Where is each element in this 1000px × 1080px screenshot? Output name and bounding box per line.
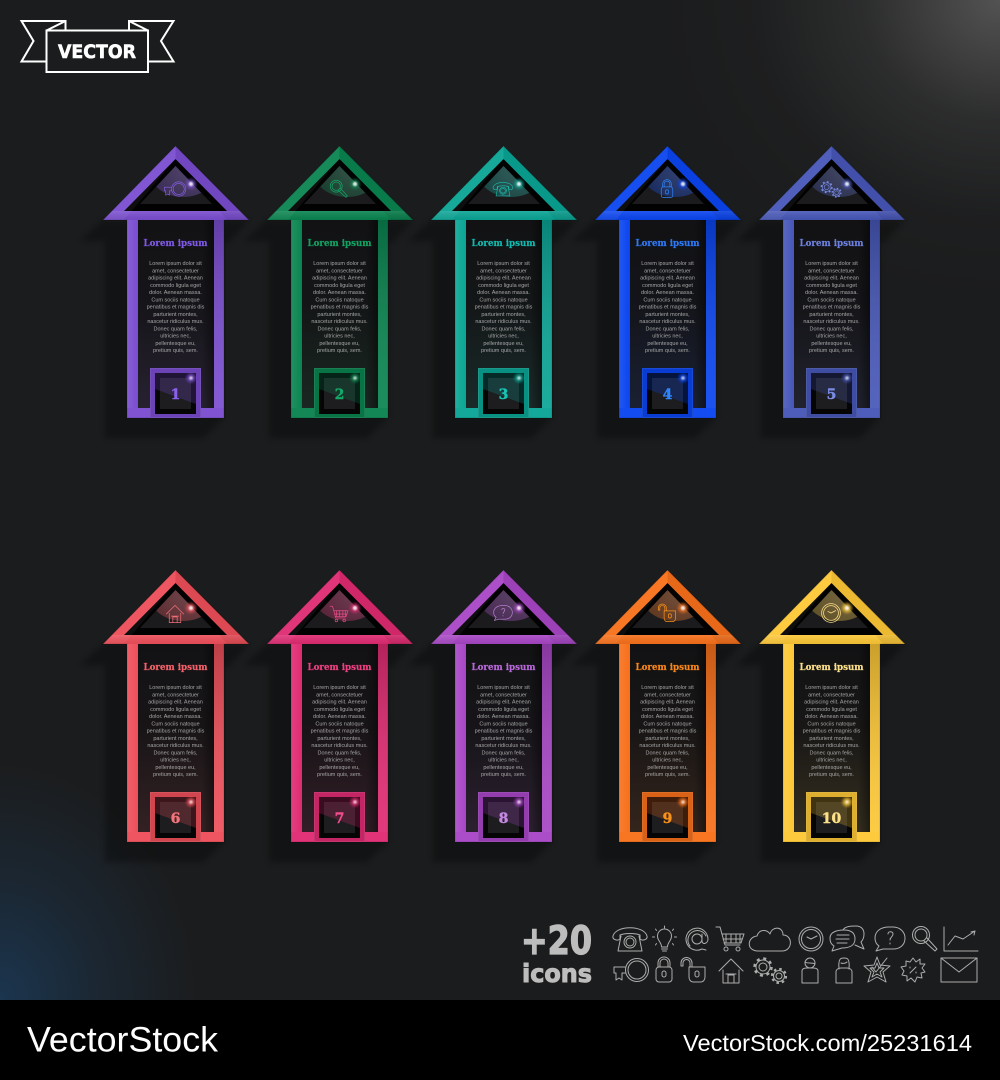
arrow 3 teal: Lorem ipsum (472, 239, 536, 249)
arrow 4 blue: parturient montes, (645, 312, 690, 318)
arrow 10 yellow: commodo ligula eget (806, 707, 857, 713)
arrow 6 red: Donec quam felis, (153, 750, 198, 756)
arrow 2 green (244, 143, 413, 438)
arrow 1 purple: pellentesque eu, (155, 341, 196, 347)
footer bar (0, 1000, 1000, 1080)
arrow 5 indigo: parturient montes, (809, 312, 854, 318)
arrow 10 yellow: 10 (822, 811, 841, 827)
arrow 9 orange: Cum sociis natoque (643, 721, 692, 727)
arrow 5 indigo: pretium quis, sem. (809, 348, 854, 354)
arrow 3 teal: commodo ligula eget (478, 283, 529, 289)
arrow 1 purple: Donec quam felis, (153, 326, 198, 332)
arrow 9 orange: Lorem ipsum (636, 663, 700, 673)
arrow 2 green: Lorem ipsum (308, 239, 372, 249)
icon: lock (661, 180, 673, 198)
icon: magnifier (330, 180, 347, 197)
arrow 5 indigo (736, 143, 905, 438)
arrow 10 yellow: pellentesque eu, (811, 765, 852, 771)
arrow 8 violet: commodo ligula eget (478, 707, 529, 713)
arrow 3 teal: Cum sociis natoque (479, 297, 528, 303)
arrow 10 yellow: Lorem ipsum dolor sit (805, 685, 858, 691)
arrow 7 pink: Lorem ipsum (308, 663, 372, 673)
arrow 8 violet: ultricies nec, (488, 758, 519, 764)
arrow 2 green: penatibus et magnis dis (311, 304, 369, 310)
arrow 7 pink: nascetur ridiculus mus. (311, 743, 368, 749)
arrow 1 purple: pretium quis, sem. (153, 348, 198, 354)
arrow 4 blue: pellentesque eu, (647, 341, 688, 347)
arrow 1 purple: nascetur ridiculus mus. (147, 319, 204, 325)
arrow 10 yellow: nascetur ridiculus mus. (803, 743, 860, 749)
arrow 9 orange: amet, consectetuer (644, 692, 691, 698)
arrow 7 pink: Cum sociis natoque (315, 721, 364, 727)
arrow 2 green: parturient montes, (317, 312, 362, 318)
arrow 8 violet: adipiscing elit. Aenean (476, 700, 531, 706)
icon set (613, 926, 978, 983)
arrow 9 orange: adipiscing elit. Aenean (640, 700, 695, 706)
arrow 10 yellow (736, 567, 905, 862)
icon: open lock (658, 604, 676, 622)
arrow 5 indigo: nascetur ridiculus mus. (803, 319, 860, 325)
arrow 10 yellow: pretium quis, sem. (809, 772, 854, 778)
arrow 7 pink: pellentesque eu, (319, 765, 360, 771)
arrow 1 purple (80, 143, 249, 438)
arrow 4 blue: penatibus et magnis dis (639, 304, 697, 310)
arrow 3 teal: pellentesque eu, (483, 341, 524, 347)
arrow 3 teal: adipiscing elit. Aenean (476, 276, 531, 282)
arrow 7 pink: 7 (335, 811, 344, 827)
arrow 4 blue: adipiscing elit. Aenean (640, 276, 695, 282)
arrow 9 orange: nascetur ridiculus mus. (639, 743, 696, 749)
arrow 2 green: commodo ligula eget (314, 283, 365, 289)
arrow 5 indigo: amet, consectetuer (808, 268, 855, 274)
arrow 6 red: Cum sociis natoque (151, 721, 200, 727)
arrow 2 green: dolor. Aenean massa. (313, 290, 366, 296)
arrow 5 indigo: Lorem ipsum dolor sit (805, 261, 858, 267)
arrow 3 teal: pretium quis, sem. (481, 348, 526, 354)
arrow 4 blue: nascetur ridiculus mus. (639, 319, 696, 325)
arrow 9 orange: pellentesque eu, (647, 765, 688, 771)
arrow 5 indigo: Lorem ipsum (800, 239, 864, 249)
arrow 6 red: adipiscing elit. Aenean (148, 700, 203, 706)
footer bar: VectorStock (27, 1020, 219, 1060)
arrow 8 violet: nascetur ridiculus mus. (475, 743, 532, 749)
icon: key (164, 182, 186, 196)
arrow 10 yellow: dolor. Aenean massa. (805, 714, 858, 720)
arrow 10 yellow: parturient montes, (809, 736, 854, 742)
arrow 2 green: Cum sociis natoque (315, 297, 364, 303)
arrow 3 teal: ultricies nec, (488, 334, 519, 340)
arrow 8 violet: Lorem ipsum dolor sit (477, 685, 530, 691)
arrow 3 teal (408, 143, 577, 438)
footer bar: VectorStock.com/25231614 (683, 1030, 972, 1056)
arrow 9 orange (572, 567, 741, 862)
+20 icons heading: icons (522, 959, 592, 988)
arrow 2 green: 2 (335, 387, 344, 403)
arrow 4 blue: ultricies nec, (652, 334, 683, 340)
arrow 8 violet: Donec quam felis, (481, 750, 526, 756)
arrow 9 orange: dolor. Aenean massa. (641, 714, 694, 720)
arrow 5 indigo: penatibus et magnis dis (803, 304, 861, 310)
arrow 5 indigo: Cum sociis natoque (807, 297, 856, 303)
arrow 9 orange: parturient montes, (645, 736, 690, 742)
arrow 9 orange: commodo ligula eget (642, 707, 693, 713)
arrow 4 blue (572, 143, 741, 438)
icon: clock (822, 604, 840, 622)
arrow 10 yellow: amet, consectetuer (808, 692, 855, 698)
arrow 10 yellow: Cum sociis natoque (807, 721, 856, 727)
arrow 10 yellow: adipiscing elit. Aenean (804, 700, 859, 706)
arrow 6 red: commodo ligula eget (150, 707, 201, 713)
arrow 5 indigo: 5 (827, 387, 836, 403)
arrow 10 yellow: penatibus et magnis dis (803, 728, 861, 734)
arrow 10 yellow: Donec quam felis, (809, 750, 854, 756)
arrow 7 pink: adipiscing elit. Aenean (312, 700, 367, 706)
arrow 1 purple: Lorem ipsum dolor sit (149, 261, 202, 267)
arrow 7 pink: Donec quam felis, (317, 750, 362, 756)
arrow 2 green: Lorem ipsum dolor sit (313, 261, 366, 267)
arrow 9 orange: penatibus et magnis dis (639, 728, 697, 734)
vector ribbon badge (22, 21, 174, 72)
+20 icons heading: +20 (521, 919, 592, 964)
arrow 6 red: dolor. Aenean massa. (149, 714, 202, 720)
arrow 9 orange: Donec quam felis, (645, 750, 690, 756)
arrow 6 red: penatibus et magnis dis (147, 728, 205, 734)
arrow 6 red: Lorem ipsum (144, 663, 208, 673)
arrow 6 red: pretium quis, sem. (153, 772, 198, 778)
arrow 9 orange: 9 (663, 811, 672, 827)
arrow 3 teal: penatibus et magnis dis (475, 304, 533, 310)
arrow 9 orange: ultricies nec, (652, 758, 683, 764)
arrow 4 blue: Donec quam felis, (645, 326, 690, 332)
arrow 6 red: Lorem ipsum dolor sit (149, 685, 202, 691)
arrow 1 purple: parturient montes, (153, 312, 198, 318)
arrow 2 green: adipiscing elit. Aenean (312, 276, 367, 282)
arrow 4 blue: dolor. Aenean massa. (641, 290, 694, 296)
arrow 5 indigo: pellentesque eu, (811, 341, 852, 347)
arrow 6 red: ultricies nec, (160, 758, 191, 764)
arrow 5 indigo: dolor. Aenean massa. (805, 290, 858, 296)
arrow 8 violet: dolor. Aenean massa. (477, 714, 530, 720)
arrow 2 green: ultricies nec, (324, 334, 355, 340)
arrow 8 violet: pretium quis, sem. (481, 772, 526, 778)
arrow 3 teal: nascetur ridiculus mus. (475, 319, 532, 325)
arrow 7 pink: commodo ligula eget (314, 707, 365, 713)
arrow 4 blue: Lorem ipsum dolor sit (641, 261, 694, 267)
arrow 5 indigo: ultricies nec, (816, 334, 847, 340)
arrow 4 blue: commodo ligula eget (642, 283, 693, 289)
arrow 9 orange: pretium quis, sem. (645, 772, 690, 778)
arrow 1 purple: amet, consectetuer (152, 268, 199, 274)
arrow 8 violet (408, 567, 577, 862)
+20 icons heading (521, 919, 592, 988)
arrow 1 purple: commodo ligula eget (150, 283, 201, 289)
arrow 7 pink: parturient montes, (317, 736, 362, 742)
icon: phone (493, 182, 513, 196)
arrow 2 green: pellentesque eu, (319, 341, 360, 347)
arrow 7 pink: Lorem ipsum dolor sit (313, 685, 366, 691)
arrow 6 red: nascetur ridiculus mus. (147, 743, 204, 749)
arrow 2 green: pretium quis, sem. (317, 348, 362, 354)
arrow 2 green: amet, consectetuer (316, 268, 363, 274)
arrow 5 indigo: commodo ligula eget (806, 283, 857, 289)
arrow 3 teal: 3 (499, 387, 508, 403)
arrow 4 blue: Lorem ipsum (636, 239, 700, 249)
arrow 6 red: parturient montes, (153, 736, 198, 742)
vector ribbon badge: VECTOR (58, 41, 136, 63)
arrow 5 indigo: Donec quam felis, (809, 326, 854, 332)
arrow 8 violet: amet, consectetuer (480, 692, 527, 698)
arrow 10 yellow: ultricies nec, (816, 758, 847, 764)
arrow 7 pink: pretium quis, sem. (317, 772, 362, 778)
arrow 8 violet: 8 (499, 811, 508, 827)
arrow 7 pink: penatibus et magnis dis (311, 728, 369, 734)
icon: question bubble (494, 606, 512, 620)
arrow 8 violet: parturient montes, (481, 736, 526, 742)
arrow 6 red: amet, consectetuer (152, 692, 199, 698)
arrow 6 red (80, 567, 249, 862)
arrow 8 violet: penatibus et magnis dis (475, 728, 533, 734)
arrow 7 pink (244, 567, 413, 862)
arrow 1 purple: penatibus et magnis dis (147, 304, 205, 310)
arrow 10 yellow: Lorem ipsum (800, 663, 864, 673)
arrow 3 teal: amet, consectetuer (480, 268, 527, 274)
arrow 7 pink: amet, consectetuer (316, 692, 363, 698)
arrow 1 purple: ultricies nec, (160, 334, 191, 340)
arrow 3 teal: Donec quam felis, (481, 326, 526, 332)
arrow 6 red: pellentesque eu, (155, 765, 196, 771)
icon: house (166, 605, 184, 623)
arrow 5 indigo: adipiscing elit. Aenean (804, 276, 859, 282)
arrow 1 purple: dolor. Aenean massa. (149, 290, 202, 296)
arrow 1 purple: 1 (171, 387, 180, 403)
arrow 4 blue: amet, consectetuer (644, 268, 691, 274)
arrow 6 red: 6 (171, 811, 180, 827)
arrow 1 purple: adipiscing elit. Aenean (148, 276, 203, 282)
arrow 9 orange: Lorem ipsum dolor sit (641, 685, 694, 691)
arrow 8 violet: pellentesque eu, (483, 765, 524, 771)
icon: cart (330, 606, 348, 622)
arrow 1 purple: Cum sociis natoque (151, 297, 200, 303)
arrow 8 violet: Lorem ipsum (472, 663, 536, 673)
arrow 4 blue: Cum sociis natoque (643, 297, 692, 303)
arrow 3 teal: dolor. Aenean massa. (477, 290, 530, 296)
arrow 7 pink: dolor. Aenean massa. (313, 714, 366, 720)
arrow 3 teal: Lorem ipsum dolor sit (477, 261, 530, 267)
arrow 2 green: Donec quam felis, (317, 326, 362, 332)
arrow 1 purple: Lorem ipsum (144, 239, 208, 249)
arrow 7 pink: ultricies nec, (324, 758, 355, 764)
arrow 4 blue: pretium quis, sem. (645, 348, 690, 354)
arrow 3 teal: parturient montes, (481, 312, 526, 318)
arrow 4 blue: 4 (663, 387, 673, 403)
icon: gears (821, 182, 841, 197)
arrow 2 green: nascetur ridiculus mus. (311, 319, 368, 325)
arrow 8 violet: Cum sociis natoque (479, 721, 528, 727)
